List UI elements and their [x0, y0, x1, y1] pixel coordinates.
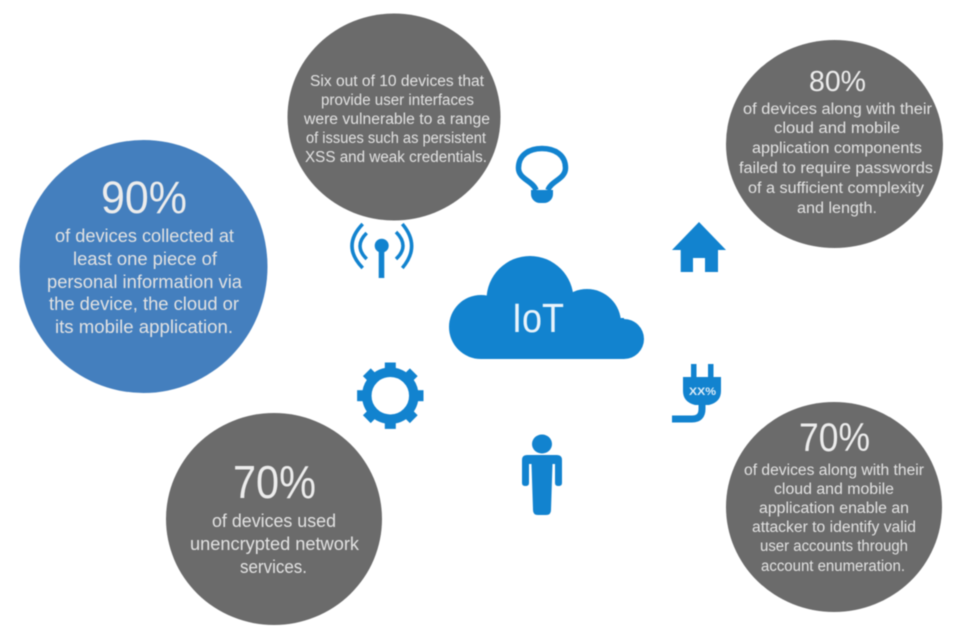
- panel: 80% weak passwords: [726, 40, 943, 248]
- description text: [744, 462, 924, 575]
- gray circle: [726, 402, 942, 612]
- cloud label: IoT: [512, 295, 564, 341]
- stat: 90%: 90%: [101, 172, 187, 223]
- plug label: XX%: [689, 386, 716, 398]
- panel: 70% unencrypted services: [166, 413, 382, 625]
- description text: of devices along with their: [744, 462, 924, 479]
- icon: person: [522, 434, 562, 515]
- description text: [303, 73, 490, 166]
- description text: of devices used: [212, 511, 336, 531]
- description text: were vulnerable to a range: [303, 111, 490, 128]
- stat: 70%: 70%: [233, 456, 316, 508]
- icon: gear: [357, 362, 424, 429]
- icon: plug: [672, 364, 721, 419]
- description text: user accounts through: [760, 538, 908, 555]
- description text: of a sufficient complexity: [748, 180, 924, 197]
- description text: account enumeration.: [761, 558, 905, 575]
- description text: of devices collected at: [55, 226, 234, 246]
- panel: 70% account enumeration: [726, 402, 942, 612]
- description text: of issues such as persistent: [306, 130, 487, 147]
- description text: application enable an: [759, 500, 909, 517]
- description text: [47, 226, 243, 337]
- description text: least one piece of: [73, 249, 218, 269]
- stat: 80%: 80%: [809, 66, 866, 98]
- gray circle: [166, 413, 382, 625]
- description text: personal information via: [47, 272, 243, 292]
- description text: Six out of 10 devices that: [310, 73, 485, 90]
- description text: unencrypted network: [190, 534, 360, 554]
- description text: application components: [752, 140, 922, 157]
- description text: and length.: [797, 200, 877, 217]
- description text: of devices along with their: [743, 101, 932, 118]
- description text: the device, the cloud or: [49, 294, 239, 314]
- description text: cloud and mobile: [774, 120, 900, 137]
- description text: attacker to identify valid: [752, 519, 916, 536]
- description text: cloud and mobile: [774, 481, 894, 498]
- panel: 90% personal information: [20, 140, 268, 393]
- gray circle: [288, 14, 500, 220]
- icon: light bulb: [518, 148, 566, 203]
- stat: 70%: 70%: [799, 416, 870, 460]
- description text: its mobile application.: [55, 317, 233, 337]
- icon: house: [672, 222, 726, 272]
- description text: XSS and weak credentials.: [305, 149, 487, 166]
- description text: failed to require passwords: [739, 160, 933, 177]
- panel: six out of 10 devices: [288, 14, 500, 220]
- icon: antenna signal: [352, 224, 412, 278]
- icon: IoT cloud: [449, 256, 644, 359]
- description text: [190, 511, 360, 577]
- description text: [739, 101, 933, 217]
- gray circle: [726, 40, 943, 248]
- description text: provide user interfaces: [321, 92, 474, 109]
- description text: services.: [240, 557, 307, 577]
- blue circle: [20, 140, 268, 393]
